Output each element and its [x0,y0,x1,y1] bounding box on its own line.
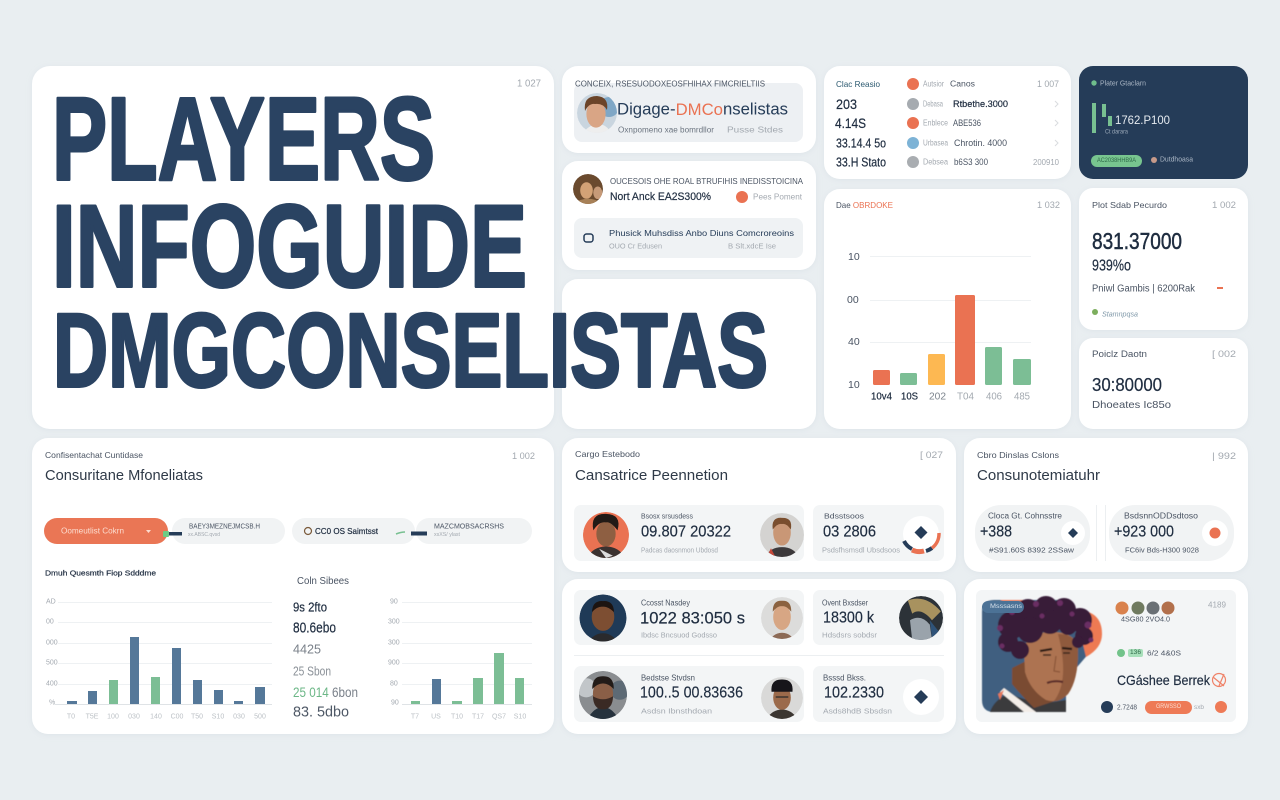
left bar chart: T50 [191,714,203,720]
stat pill: right: FC6iv Bds-H300 9028 [1125,546,1199,554]
left bar chart: S10 [212,714,224,720]
panel tag: title card: 1 027 [517,78,541,90]
panel: second number card: 30:80000 [1092,375,1162,395]
portrait [982,596,1102,712]
panel: performance card bottom: Bedstse Stvdsn [641,674,695,682]
panel: performance card top: Psdsfhsmsdl Ubsdsoos [822,546,900,554]
list numbers [835,96,886,170]
list rows: Debasa [923,100,943,108]
panel: dark stat card [1079,66,1248,179]
left bar chart: T5E [86,714,99,720]
panel: dark stat card: Dutdhoasa [1160,156,1193,164]
panel: consultant card: 1 002 [512,451,535,461]
panel: performance card bottom: 1022 83:050 s [640,608,745,628]
status chip: 6/2 4&0S [1147,648,1181,658]
right bar chart: 300 [388,640,400,646]
panel: performance card top: Padcas daosnmon Ubdosd [641,546,718,554]
avatar: textured portrait [899,596,943,640]
pill row: xx.ABSC.qvsd [188,532,220,538]
pill row: Oomeutlist Cokrn [61,526,124,536]
status chip: 136 [1130,650,1142,656]
left bar chart: T0 [67,714,75,720]
action row: 2.7248 [1117,704,1137,712]
panel: performance card top: [ 027 [920,450,943,460]
left bar chart: AD [46,598,56,606]
panel: profile card [964,579,1248,734]
right bar chart: 80 [390,680,398,688]
panel: consultant card [32,438,554,734]
column stats: 4425 [293,642,321,656]
avatar: group [573,174,603,204]
left bar chart: % [49,700,55,706]
right bar chart: 300 [388,618,400,626]
column stats [293,575,358,720]
panel: performance card bottom: Ovent Bxsdser [822,598,868,608]
panel: consultant card: Consuritane Mfoneliatas [45,468,203,484]
right bar chart: T7 [411,714,419,720]
column stats: 83. 5dbo [293,704,349,720]
action row [1101,701,1227,714]
chart y axis: 40 [848,336,860,348]
panel: list card: 200910 [1033,157,1059,167]
panel: big number card [1079,188,1248,330]
panel: dark stat card: AC2038HHB9A [1097,158,1136,164]
right bar chart: 90 [390,598,398,606]
list rows: Chrotin. 4000 [954,138,1007,148]
list numbers: 33.14.4 5o [836,136,886,150]
panel: performance card top: Cargo Estebodo [575,449,640,459]
left bar chart: 500 [46,660,58,666]
panel: headline card: Pusse Stdes [727,126,783,134]
panel: performance card bottom [562,579,956,734]
right bar chart: 90 [391,700,399,706]
avatar: man on navy [580,594,626,644]
list rows: Urbasea [923,138,948,148]
panel: summary card: Nort Anck EA2S300% [610,191,711,203]
right bar chart: QS7 [492,714,506,720]
pill row: MAZCMOBSACRSHS [434,524,504,530]
panel: performance card bottom: 18300 k [823,610,875,626]
column stats: 25 Sbon [293,664,331,678]
column stats: Coln Sibees [297,575,349,587]
list rows: ABE536 [953,118,981,128]
panel: summary card: OUO Cr Edusen [609,242,662,250]
right bar chart: T10 [451,714,463,720]
headline text: Digage-DMConselistas [617,100,788,118]
left bar chart: 000 [46,640,58,646]
stat pill: right: +923 000 [1114,524,1174,540]
panel: performance card bottom: Asds8hdB Sbsdsn [823,706,892,716]
panel: performance card bottom: Bsssd Bkss. [823,674,866,682]
panel: profile card: 4189 [1208,600,1227,610]
left bar chart [46,598,272,720]
panel: performance card top: Bdsstsoos [824,512,864,520]
action row: GRWSSO [1156,704,1181,710]
panel: consumption card: Cbro Dinslas Cslons [977,450,1059,460]
title: PLAYERS [52,74,435,206]
right bar chart: T17 [472,714,484,720]
chart x axis: 202 [929,392,946,402]
panel: summary card: Phusick Muhsdiss Anbo Diuns Comcroreoins [609,228,794,238]
title: INFOGUIDE [52,180,527,312]
panel: headline card: Oxnpomeno xae bomrdllor [618,126,714,134]
avatar: man with cap [761,677,803,721]
left bar chart: 100 [107,714,119,720]
stat pill: left: Cloca Gt. Cohnsstre [988,512,1063,520]
right bar chart [388,598,532,720]
chart heading: Dmuh Quesmth Fiop Sdddme [45,568,156,578]
panel: bar chart card [824,189,1071,429]
icon: small red mark [1217,287,1223,289]
chart y axis: 10 [848,379,860,391]
panel: second number card: Poiclz Daotn [1092,349,1147,359]
chart gridlines [870,256,1031,342]
panel: consumption card: Consunotemiatuhr [977,468,1100,484]
panel: blank card [562,279,816,429]
panel: list card: 1 007 [1037,79,1059,89]
chart y axis: 10 [848,251,860,263]
status chip [1117,648,1181,658]
panel: title card [32,66,554,429]
panel: performance card bottom: 100..5 00.83636 [640,684,743,702]
panel: performance card top: Bsosx srsusdess [641,512,693,520]
panel: performance card bottom: Ccosst Nasdey [641,598,690,608]
panel: summary card: Pees Poment [753,192,803,202]
left bar chart: 00 [46,618,54,626]
avatar: young man [577,93,617,130]
stat pill: right [1109,505,1234,561]
avatar: fair man [761,597,803,641]
column stats: 80.6ebo [293,620,336,636]
pill row: CC0 OS Saimtsst [315,526,379,536]
icon: square [584,234,593,242]
panel: list card [824,66,1071,179]
right bar chart: 900 [388,660,400,666]
left bar chart: C00 [171,714,184,720]
chart y axis: 00 [847,294,859,306]
panel: performance card top: 09.807 20322 [641,524,731,540]
panel: dark stat card: Plater Gtaclarn [1100,78,1146,88]
panel: big number card: Stamnpqsa [1102,310,1138,318]
list rows: Debsea [923,158,948,166]
panel: performance card top: Cansatrice Peennetion [575,468,728,484]
icon: red outline badge [1212,674,1226,686]
panel: consumption card [964,438,1248,572]
panel: performance card bottom: 102.2330 [824,684,884,702]
right bar chart: US [431,714,441,720]
list numbers: 203 [836,96,857,112]
column stats: 9s 2fto [293,600,327,614]
chart x axis: 10v4 [871,392,892,402]
panel: performance card bottom: Ibdsc Bncsuod Godsso [641,630,717,640]
panel: second number card: Dhoeates Ic85o [1092,399,1171,411]
list rows: b6S3 300 [954,157,988,167]
panel: profile card: Msssasns [990,604,1022,610]
title [52,74,768,410]
panel: summary card [562,161,816,270]
chart x axis: 10S [901,392,918,402]
panel: list card: Clac Reasio [836,79,880,89]
green pill [1091,155,1142,167]
left bar chart: 030 [128,714,140,720]
right bar chart: S10 [514,714,526,720]
pill row: BAEY3MEZNEJMCSB.H [189,524,260,530]
chart x axis: 406 [986,392,1002,402]
mini bars [1092,103,1112,133]
icon: diamond [903,679,939,715]
panel: big number card: 831.37000 [1092,228,1182,254]
list rows: Enblece [923,118,948,128]
stat pill: left: +388 [980,524,1012,540]
avatar group: 4SG80 2VO4.0 [1121,616,1170,624]
panel: big number card: Plot Sdab Pecurdo [1092,200,1167,210]
panel: dark stat card: Ct darara [1105,128,1128,136]
stat pill: right: BsdsnnODDsdtoso [1124,512,1199,520]
panel: consultant card: Confisentachat Cuntidase [45,450,143,460]
panel: second number card [1079,338,1248,429]
pill row: xsXS/ ylast [434,532,460,538]
avatar: bearded man [579,671,627,719]
list numbers: 4.14S [835,115,866,131]
list rows: Canos [950,80,975,88]
left bar chart: 140 [150,714,162,720]
panel: bar chart card: 1 032 [1037,200,1060,210]
panel: performance card top [562,438,956,572]
panel: summary card: OUCESOIS OHE ROAL BTRUFIHIS INEDISSTOICINA [610,176,803,186]
panel: second number card: [ 002 [1212,349,1236,359]
portrait tag [982,601,1024,613]
panel: summary card: B Slt.xdcE Ise [728,242,776,250]
profile name: CGáshee Berrek [1117,672,1211,688]
panel: big number card: 939%o [1092,258,1131,274]
list rows: Autsior [923,80,944,88]
panel: dark stat card: 1762.P100 [1115,115,1170,127]
chart bars [873,295,1031,385]
panel: headline card [562,66,816,153]
chart x axis: T04 [957,392,974,402]
panel: big number card: 1 002 [1212,200,1236,210]
panel: performance card bottom: Hdsdsrs sobdsr [822,630,878,640]
action row: sxb [1194,705,1205,711]
avatar: curly man on orange [583,512,629,560]
icon: orange badge [736,191,748,203]
stat pill: left: #S91.60S 8392 2SSaw [989,546,1075,554]
column stats: 25 014 6bon [293,684,358,700]
panel: big number card: Pniwl Gambis | 6200Rak [1092,284,1196,294]
chart y axis [847,251,860,391]
avatar: man on grey [760,513,804,559]
avatar group [1116,602,1174,624]
pill row [44,518,532,544]
panel: bar chart card: Dae OBRDOKE [836,200,893,210]
icon: green status [1092,309,1098,315]
panel: performance card bottom: Asdsn Ibnsthdoan [641,706,712,716]
panel: headline card: CONCEIX, RSESUODOXEOSFHIHAX FIMCRIELTIIS [575,80,765,88]
left bar chart: 030 [233,714,245,720]
list rows [907,78,1008,168]
list numbers: 33.H Stato [836,154,886,170]
left bar chart: 400 [46,680,58,688]
left bar chart: 500 [254,714,266,720]
title: DMGCONSELISTAS [53,292,768,410]
panel: performance card top: 03 2806 [823,524,876,540]
chart x axis [871,392,1030,402]
stat pill: left [975,505,1090,561]
panel: consumption card: | 992 [1212,451,1236,461]
list rows: Rtbethe.3000 [953,99,1008,109]
icon: diamond with ring [903,516,939,552]
chart x axis: 485 [1014,392,1030,402]
